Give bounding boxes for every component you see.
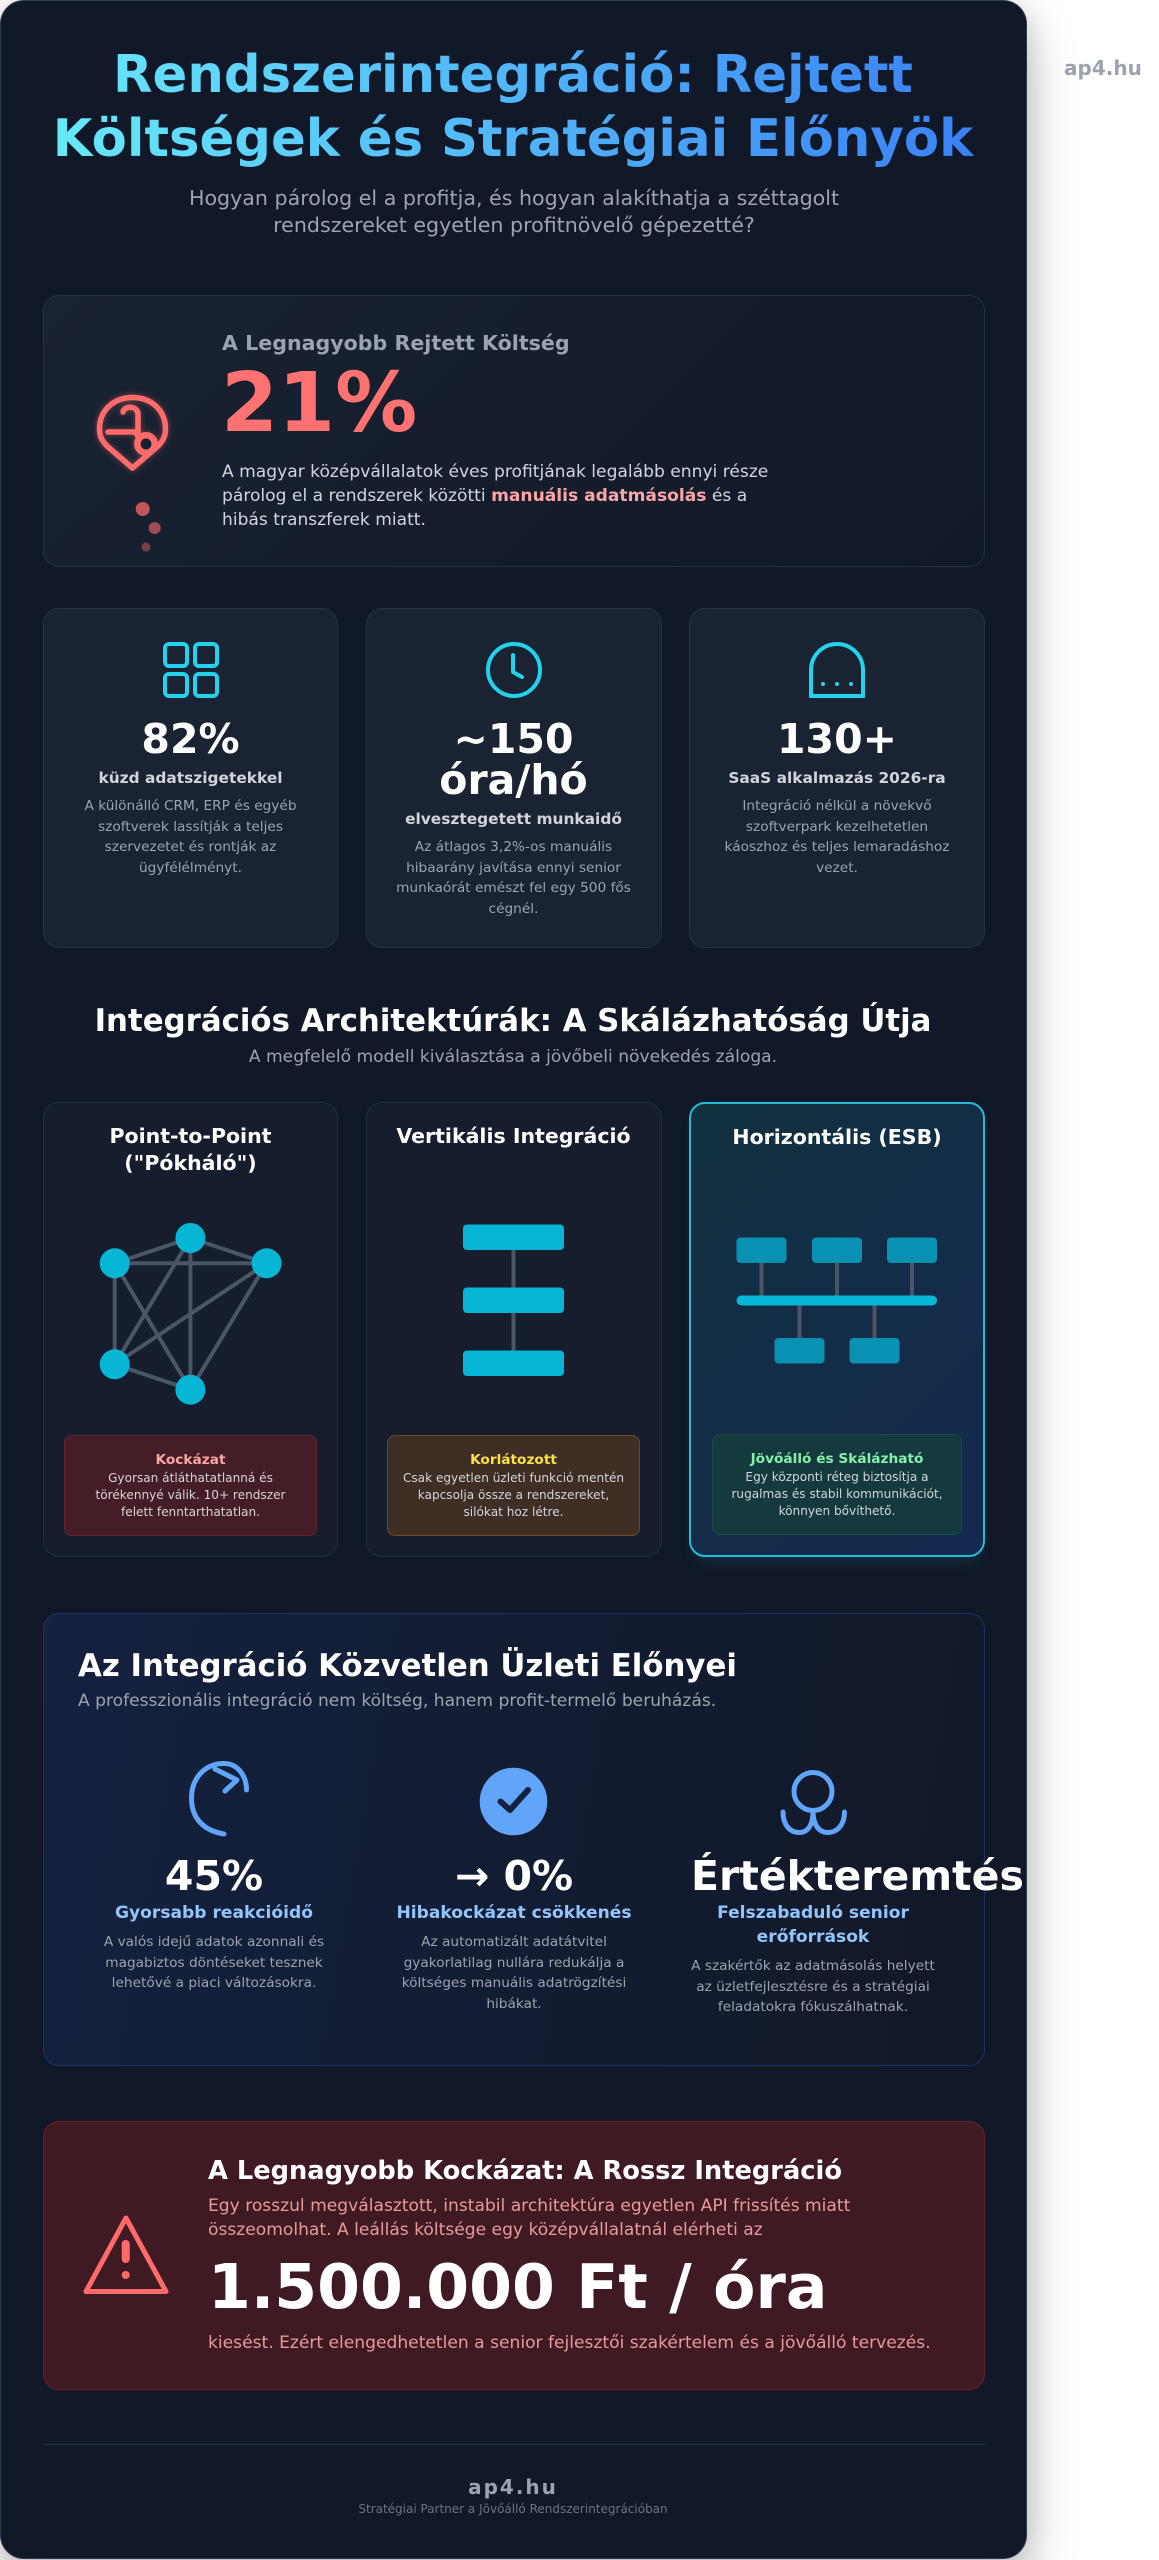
stat description bbox=[725, 798, 949, 876]
card title: Vertikális Integráció bbox=[396, 1124, 631, 1148]
benefit label bbox=[717, 1903, 909, 1947]
stat description: A különálló CRM, ERP és egyéb bbox=[84, 798, 297, 814]
callout text: könnyen bővíthető. bbox=[779, 1504, 895, 1518]
benefit value: value creation: Értékteremtés bbox=[691, 1852, 1024, 1900]
icon: clock bbox=[486, 642, 542, 698]
corner brand label: ap4.hu bbox=[1064, 56, 1142, 80]
stat label: SaaS alkalmazás 2026-ra bbox=[728, 769, 946, 787]
benefit description: az üzletfejlesztésre és a stratégiai bbox=[696, 1979, 930, 1995]
callout text: Egy központi réteg biztosítja a bbox=[745, 1470, 929, 1484]
footer brand: ap4.hu bbox=[468, 2475, 558, 2499]
callout text: silókat hoz létre. bbox=[464, 1505, 564, 1519]
benefit description: A szakértők az adatmásolás helyett bbox=[691, 1958, 935, 1974]
risk heading: A Legnagyobb Kockázat: A Rossz Integráció bbox=[208, 2156, 842, 2186]
benefit description: feladatokra fókuszálhatnak. bbox=[718, 1999, 908, 2015]
callout text: Gyorsan átláthatatlanná és bbox=[108, 1471, 273, 1485]
benefit description: Az automatizált adatátvitel bbox=[421, 1934, 607, 1950]
hero description: párolog el a rendszerek közötti manuális adatmásolás és a bbox=[222, 486, 747, 506]
stat description: Az átlagos 3,2%-os manuális bbox=[415, 839, 612, 855]
subtitle: Hogyan párolog el a profitja, és hogyan alakíthatja a széttagolt bbox=[189, 186, 839, 210]
stat description: szervezetet és rontják az bbox=[105, 839, 276, 855]
callout text bbox=[96, 1471, 286, 1519]
stat description: szoftverpark kezelhetetlen bbox=[746, 819, 928, 835]
callout: limited bbox=[387, 1435, 640, 1536]
icon: leaking pin with drops bbox=[93, 391, 172, 552]
benefit value 0%: → 0% bbox=[455, 1852, 573, 1900]
callout: future-proof bbox=[712, 1434, 962, 1535]
stat card: 82% bbox=[43, 608, 338, 948]
diagram: spider web bbox=[100, 1223, 282, 1405]
callout text: Csak egyetlen üzleti funkció mentén bbox=[403, 1471, 624, 1485]
stat card: 150 hours bbox=[366, 608, 662, 948]
footer tagline: Stratégiai Partner a Jövőálló Rendszerintegrációban bbox=[358, 2502, 668, 2516]
benefit description: gyakorlatilag nullára redukálja a bbox=[404, 1955, 624, 1971]
diagram: service bus bbox=[736, 1238, 937, 1364]
callout title: Jövőálló és Skálázható bbox=[751, 1451, 923, 1467]
callout: risk bbox=[64, 1435, 317, 1536]
stat label: elvesztegetett munkaidő bbox=[405, 810, 622, 828]
stat description: ügyfélélményt. bbox=[139, 860, 242, 876]
stat label: küzd adatszigetekkel bbox=[98, 769, 283, 787]
benefit description: hibákat. bbox=[486, 1996, 542, 2012]
card title: Point-to-Point bbox=[110, 1124, 271, 1148]
benefit value 45%: 45% bbox=[165, 1852, 263, 1900]
stat description: munkaórát emészt fel egy 500 fős bbox=[396, 880, 631, 896]
benefit description bbox=[402, 1934, 626, 2012]
panel: biggest risk bbox=[43, 2121, 985, 2390]
stat description: hibaarány javítása ennyi senior bbox=[406, 860, 621, 876]
stat value 150 hours: ~150 bbox=[454, 715, 573, 763]
risk text: összeomolhat. A leállás költsége egy középvállalatnál elérheti az bbox=[208, 2220, 763, 2240]
icon: grid bbox=[163, 642, 219, 698]
icon: check circle bbox=[480, 1768, 548, 1836]
section subtitle: A megfelelő modell kiválasztása a jövőbeli növekedés záloga. bbox=[249, 1047, 777, 1067]
benefit label: erőforrások bbox=[757, 1927, 869, 1947]
benefit label: Gyorsabb reakcióidő bbox=[115, 1903, 313, 1923]
panel: business benefits bbox=[43, 1613, 985, 2066]
benefits heading: Az Integráció Közvetlen Üzleti Előnyei bbox=[78, 1648, 737, 1684]
section heading: architectures: Integrációs Architektúrák: A Skálázhatóság Útja bbox=[95, 1003, 931, 1039]
benefit description: lehetővé a piaci változásokra. bbox=[112, 1975, 316, 1991]
diagram: vertical stacks bbox=[463, 1224, 564, 1376]
risk text: Egy rosszul megválasztott, instabil architektúra egyetlen API frissítés miatt bbox=[208, 2196, 850, 2216]
risk number: 1.500.000 Ft / óra bbox=[208, 2251, 827, 2323]
hero description bbox=[222, 462, 768, 530]
divider bbox=[43, 2444, 985, 2445]
icon: rotate arrow bbox=[189, 1761, 249, 1836]
callout text bbox=[403, 1471, 624, 1519]
callout text: törékennyé válik. 10+ rendszer bbox=[96, 1488, 285, 1502]
stat value 150 hours bbox=[439, 715, 588, 804]
callout title: Kockázat bbox=[156, 1452, 225, 1468]
card title bbox=[110, 1124, 271, 1175]
stat description: vezet. bbox=[816, 860, 858, 876]
hero number 21%: 21% bbox=[221, 356, 417, 451]
stat description: cégnél. bbox=[489, 901, 538, 917]
title: Költségek és Stratégiai Előnyök bbox=[53, 109, 973, 169]
panel: horizontal ESB bbox=[689, 1102, 985, 1557]
panel: point-to-point bbox=[43, 1102, 338, 1557]
benefit description: A valós idejű adatok azonnali és bbox=[104, 1934, 324, 1950]
subtitle bbox=[189, 186, 839, 237]
callout title: Korlátozott bbox=[470, 1452, 557, 1468]
icon: warning triangle bbox=[84, 2216, 168, 2294]
title bbox=[13, 43, 1013, 171]
stat card: 130+ bbox=[689, 608, 985, 948]
hero description: hibás transzferek miatt. bbox=[222, 510, 426, 530]
stat value 82%: 82% bbox=[141, 715, 240, 763]
benefit description: költséges manuális adatrögzítési bbox=[402, 1975, 626, 1991]
benefits subtitle: A professzionális integráció nem költség, hanem profit-termelő beruházás. bbox=[78, 1691, 716, 1711]
benefit description bbox=[691, 1958, 935, 2015]
panel: biggest hidden cost bbox=[43, 295, 985, 567]
icon: people resource bbox=[780, 1770, 847, 1835]
stat description: Integráció nélkül a növekvő bbox=[742, 798, 932, 814]
benefit label: Felszabaduló senior bbox=[717, 1903, 909, 1923]
stat description: káoszhoz és teljes lemaradáshoz bbox=[725, 839, 949, 855]
callout text: rugalmas és stabil kommunikációt, bbox=[731, 1487, 943, 1501]
stat description bbox=[396, 839, 631, 917]
title: Rendszerintegráció: Rejtett bbox=[113, 45, 913, 105]
risk text bbox=[208, 2196, 850, 2240]
stat description bbox=[84, 798, 297, 876]
hero description: A magyar középvállalatok éves profitjának legalább ennyi része bbox=[222, 462, 768, 482]
stat value 150 hours: óra/hó bbox=[439, 756, 588, 804]
subtitle: rendszereket egyetlen profitnövelő gépezetté? bbox=[273, 213, 755, 237]
stat description: szoftverek lassítják a teljes bbox=[98, 819, 283, 835]
icon: dome bbox=[809, 642, 865, 698]
card title: ("Pókháló") bbox=[124, 1151, 257, 1175]
hero heading: A Legnagyobb Rejtett Költség bbox=[222, 331, 570, 355]
callout text: kapcsolja össze a rendszereket, bbox=[418, 1488, 609, 1502]
panel: vertical integration bbox=[366, 1102, 662, 1557]
callout text: felett fenntarthatatlan. bbox=[121, 1505, 260, 1519]
benefit description bbox=[104, 1934, 324, 1991]
stat value 130+: 130+ bbox=[777, 715, 897, 763]
benefit description: magabiztos döntéseket tesznek bbox=[105, 1955, 323, 1971]
risk text end: kiesést. Ezért elengedhetetlen a senior fejlesztői szakértelem és a jövőálló tervezés. bbox=[208, 2333, 931, 2353]
card title: Horizontális (ESB) bbox=[732, 1125, 942, 1149]
callout text bbox=[731, 1470, 943, 1518]
benefit label: Hibakockázat csökkenés bbox=[396, 1903, 632, 1923]
